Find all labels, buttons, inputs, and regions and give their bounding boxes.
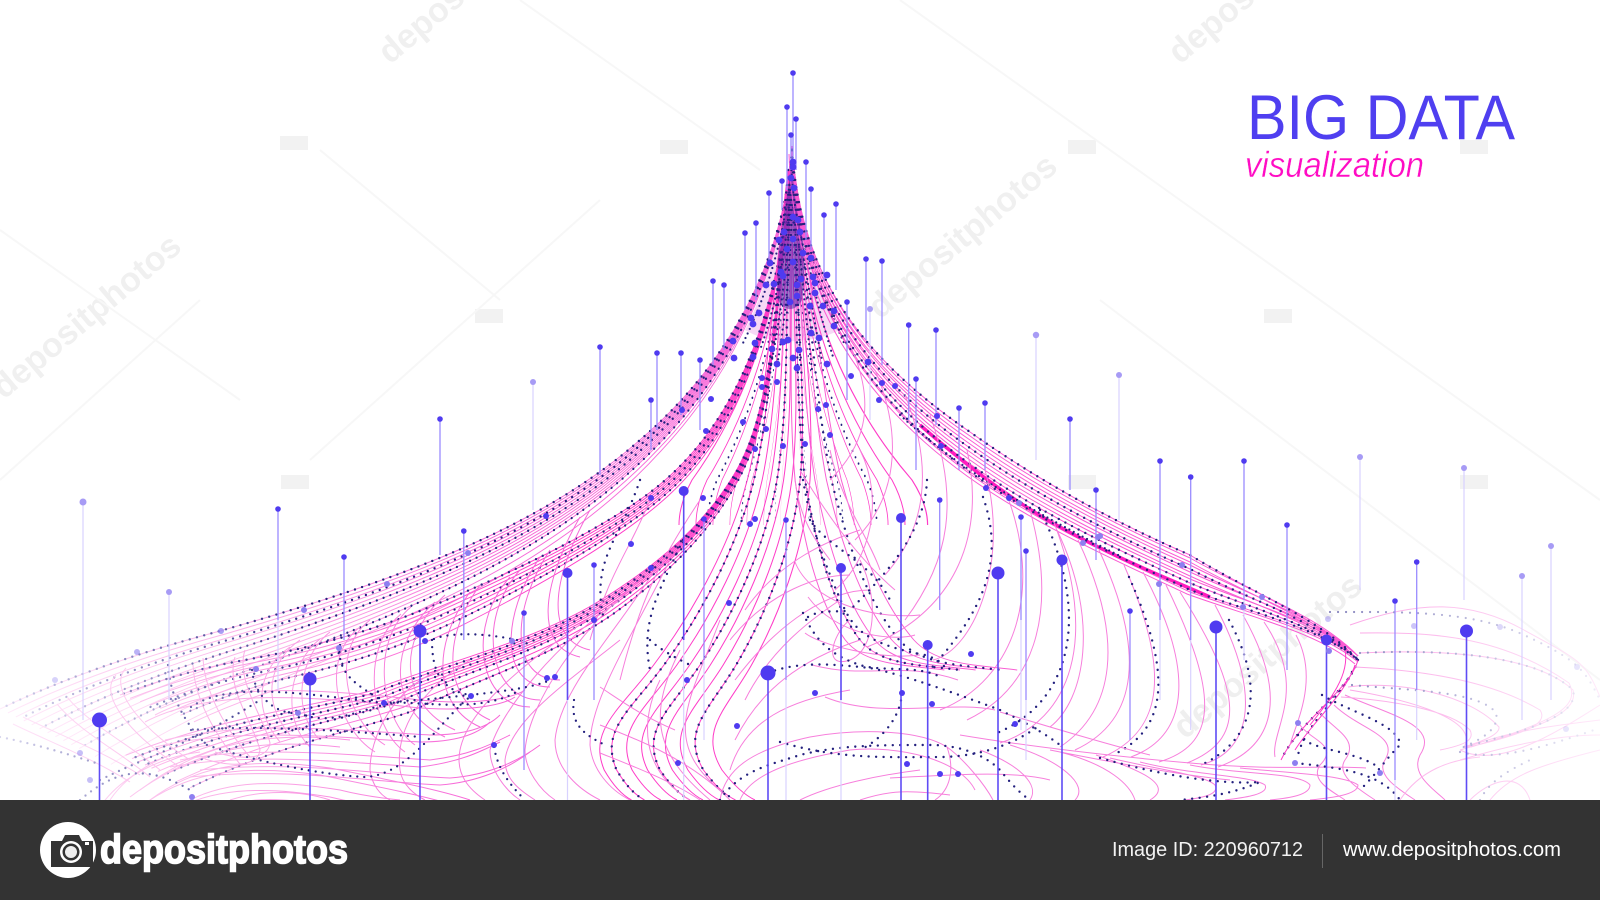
ribbon B: second left band xyxy=(120,170,792,722)
right band dark spine xyxy=(920,425,1210,597)
ribbon C dotted rows xyxy=(132,164,790,788)
ribbon C: third left band xyxy=(126,160,790,788)
faint stock watermarks: depositphotos xyxy=(861,146,1065,326)
seam and lower right waves xyxy=(960,695,1445,800)
lower centre left S curves xyxy=(370,500,730,800)
website text: www.depositphotos.com xyxy=(1342,839,1561,861)
left dotted contours xyxy=(0,634,605,800)
ribbon A: outer left pink band xyxy=(0,150,792,764)
left contour lines xyxy=(13,510,590,807)
title block xyxy=(1245,83,1515,185)
pin heads: solid xyxy=(92,70,1473,727)
heading: BIG DATA: BIG DATA xyxy=(1247,83,1515,153)
right band lines xyxy=(789,146,1358,664)
ribbon B dotted rows xyxy=(120,170,792,715)
peak dense core xyxy=(745,150,840,341)
floating data dots on the peak and waves xyxy=(381,159,1018,777)
peak fan of dotted lines xyxy=(707,150,877,525)
lower right dotted waves xyxy=(1100,695,1400,800)
right contour arcs xyxy=(830,345,1306,767)
peak dark dotted core xyxy=(742,155,845,370)
subheading: visualization: visualization xyxy=(1245,144,1424,185)
logo wordmark: depositphotos xyxy=(100,826,348,872)
pin stems: light xyxy=(83,309,1551,800)
pin stems: strong to the bottom xyxy=(100,491,1466,800)
pale right wave lines xyxy=(1341,607,1600,800)
ribbon D: central band to the bottom xyxy=(595,170,855,800)
right contour dotted arcs xyxy=(927,497,1251,765)
ribbon E: central right band xyxy=(776,170,1017,670)
peak fan of pink lines xyxy=(679,150,928,525)
pin stems: medium xyxy=(278,73,1417,780)
pin heads: light xyxy=(80,306,1554,595)
central contours and loops xyxy=(720,450,1150,800)
ribbon E dotted rows xyxy=(792,170,1002,670)
floating data dots, faded xyxy=(52,500,1580,800)
footer bar xyxy=(0,800,1600,900)
right tip return lines xyxy=(1281,650,1358,760)
peak dark core xyxy=(777,160,804,309)
image id text: Image ID: 220960712 xyxy=(1112,839,1303,861)
faint stock watermarks: depositphotos xyxy=(1166,566,1370,746)
right band dotted rows xyxy=(792,150,1358,760)
central dotted contours xyxy=(600,480,1060,800)
ribbon A dotted rows xyxy=(0,150,792,749)
pale right dotted waves xyxy=(1330,612,1600,800)
icon: camera logo xyxy=(40,822,96,878)
ribbon D dotted rows xyxy=(608,170,836,800)
